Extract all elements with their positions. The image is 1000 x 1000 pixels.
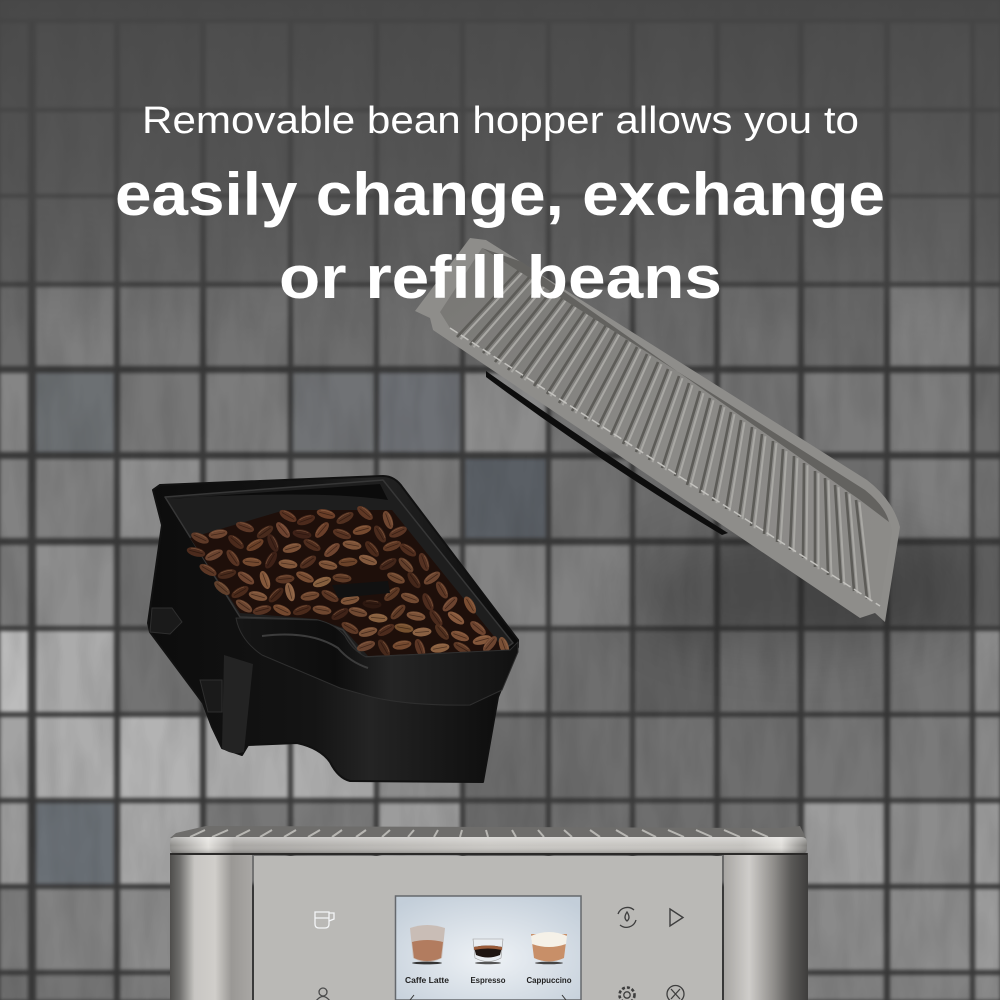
lid ribs	[457, 267, 867, 599]
hopper interior	[165, 480, 513, 657]
drink labels: Caffe Latte	[405, 976, 450, 985]
drink: cappuccino	[531, 932, 567, 964]
heading bold line 2: or refill beans	[279, 244, 722, 311]
hopper centre tab	[332, 581, 390, 598]
icon: user	[316, 988, 330, 1000]
icon: cancel	[667, 986, 684, 1000]
top band	[170, 837, 807, 855]
icon: cup	[315, 912, 334, 928]
hopper side clips	[150, 608, 222, 712]
rim highlight	[262, 634, 368, 668]
drink: caffe latte	[410, 925, 445, 964]
lid upper inner wall	[482, 248, 889, 522]
coffee bean hopper	[148, 476, 518, 782]
coffee machine	[170, 826, 808, 1000]
icon: settings gear	[620, 988, 634, 1000]
lid underside shadow edge	[486, 371, 728, 535]
icon: rinse cycle	[618, 907, 636, 927]
right steel column	[724, 853, 808, 1000]
heading	[115, 100, 885, 311]
hopper corner post	[222, 655, 253, 753]
touch screen	[396, 896, 581, 1000]
heading bold line 1: easily change, exchange	[115, 161, 885, 228]
bean hopper lid	[415, 238, 900, 622]
espresso label: Espresso	[470, 976, 506, 985]
left steel column	[170, 853, 252, 1000]
control panel	[254, 856, 722, 1000]
lid rib highlights	[460, 269, 870, 601]
heading intro line: Removable bean hopper allows you to	[142, 100, 859, 142]
bean pile	[186, 504, 511, 658]
interior back wall	[170, 484, 388, 500]
drink: espresso	[473, 939, 503, 964]
lid lower lip	[450, 328, 880, 606]
top grille	[170, 826, 806, 838]
lid outer shell	[415, 238, 900, 622]
hopper front rim	[236, 618, 518, 705]
cappuccino label: Cappuccino	[526, 976, 572, 985]
lid inner tray	[440, 248, 892, 606]
screen arrows	[410, 995, 566, 1000]
icon: play	[670, 909, 683, 926]
hopper body	[148, 476, 518, 782]
